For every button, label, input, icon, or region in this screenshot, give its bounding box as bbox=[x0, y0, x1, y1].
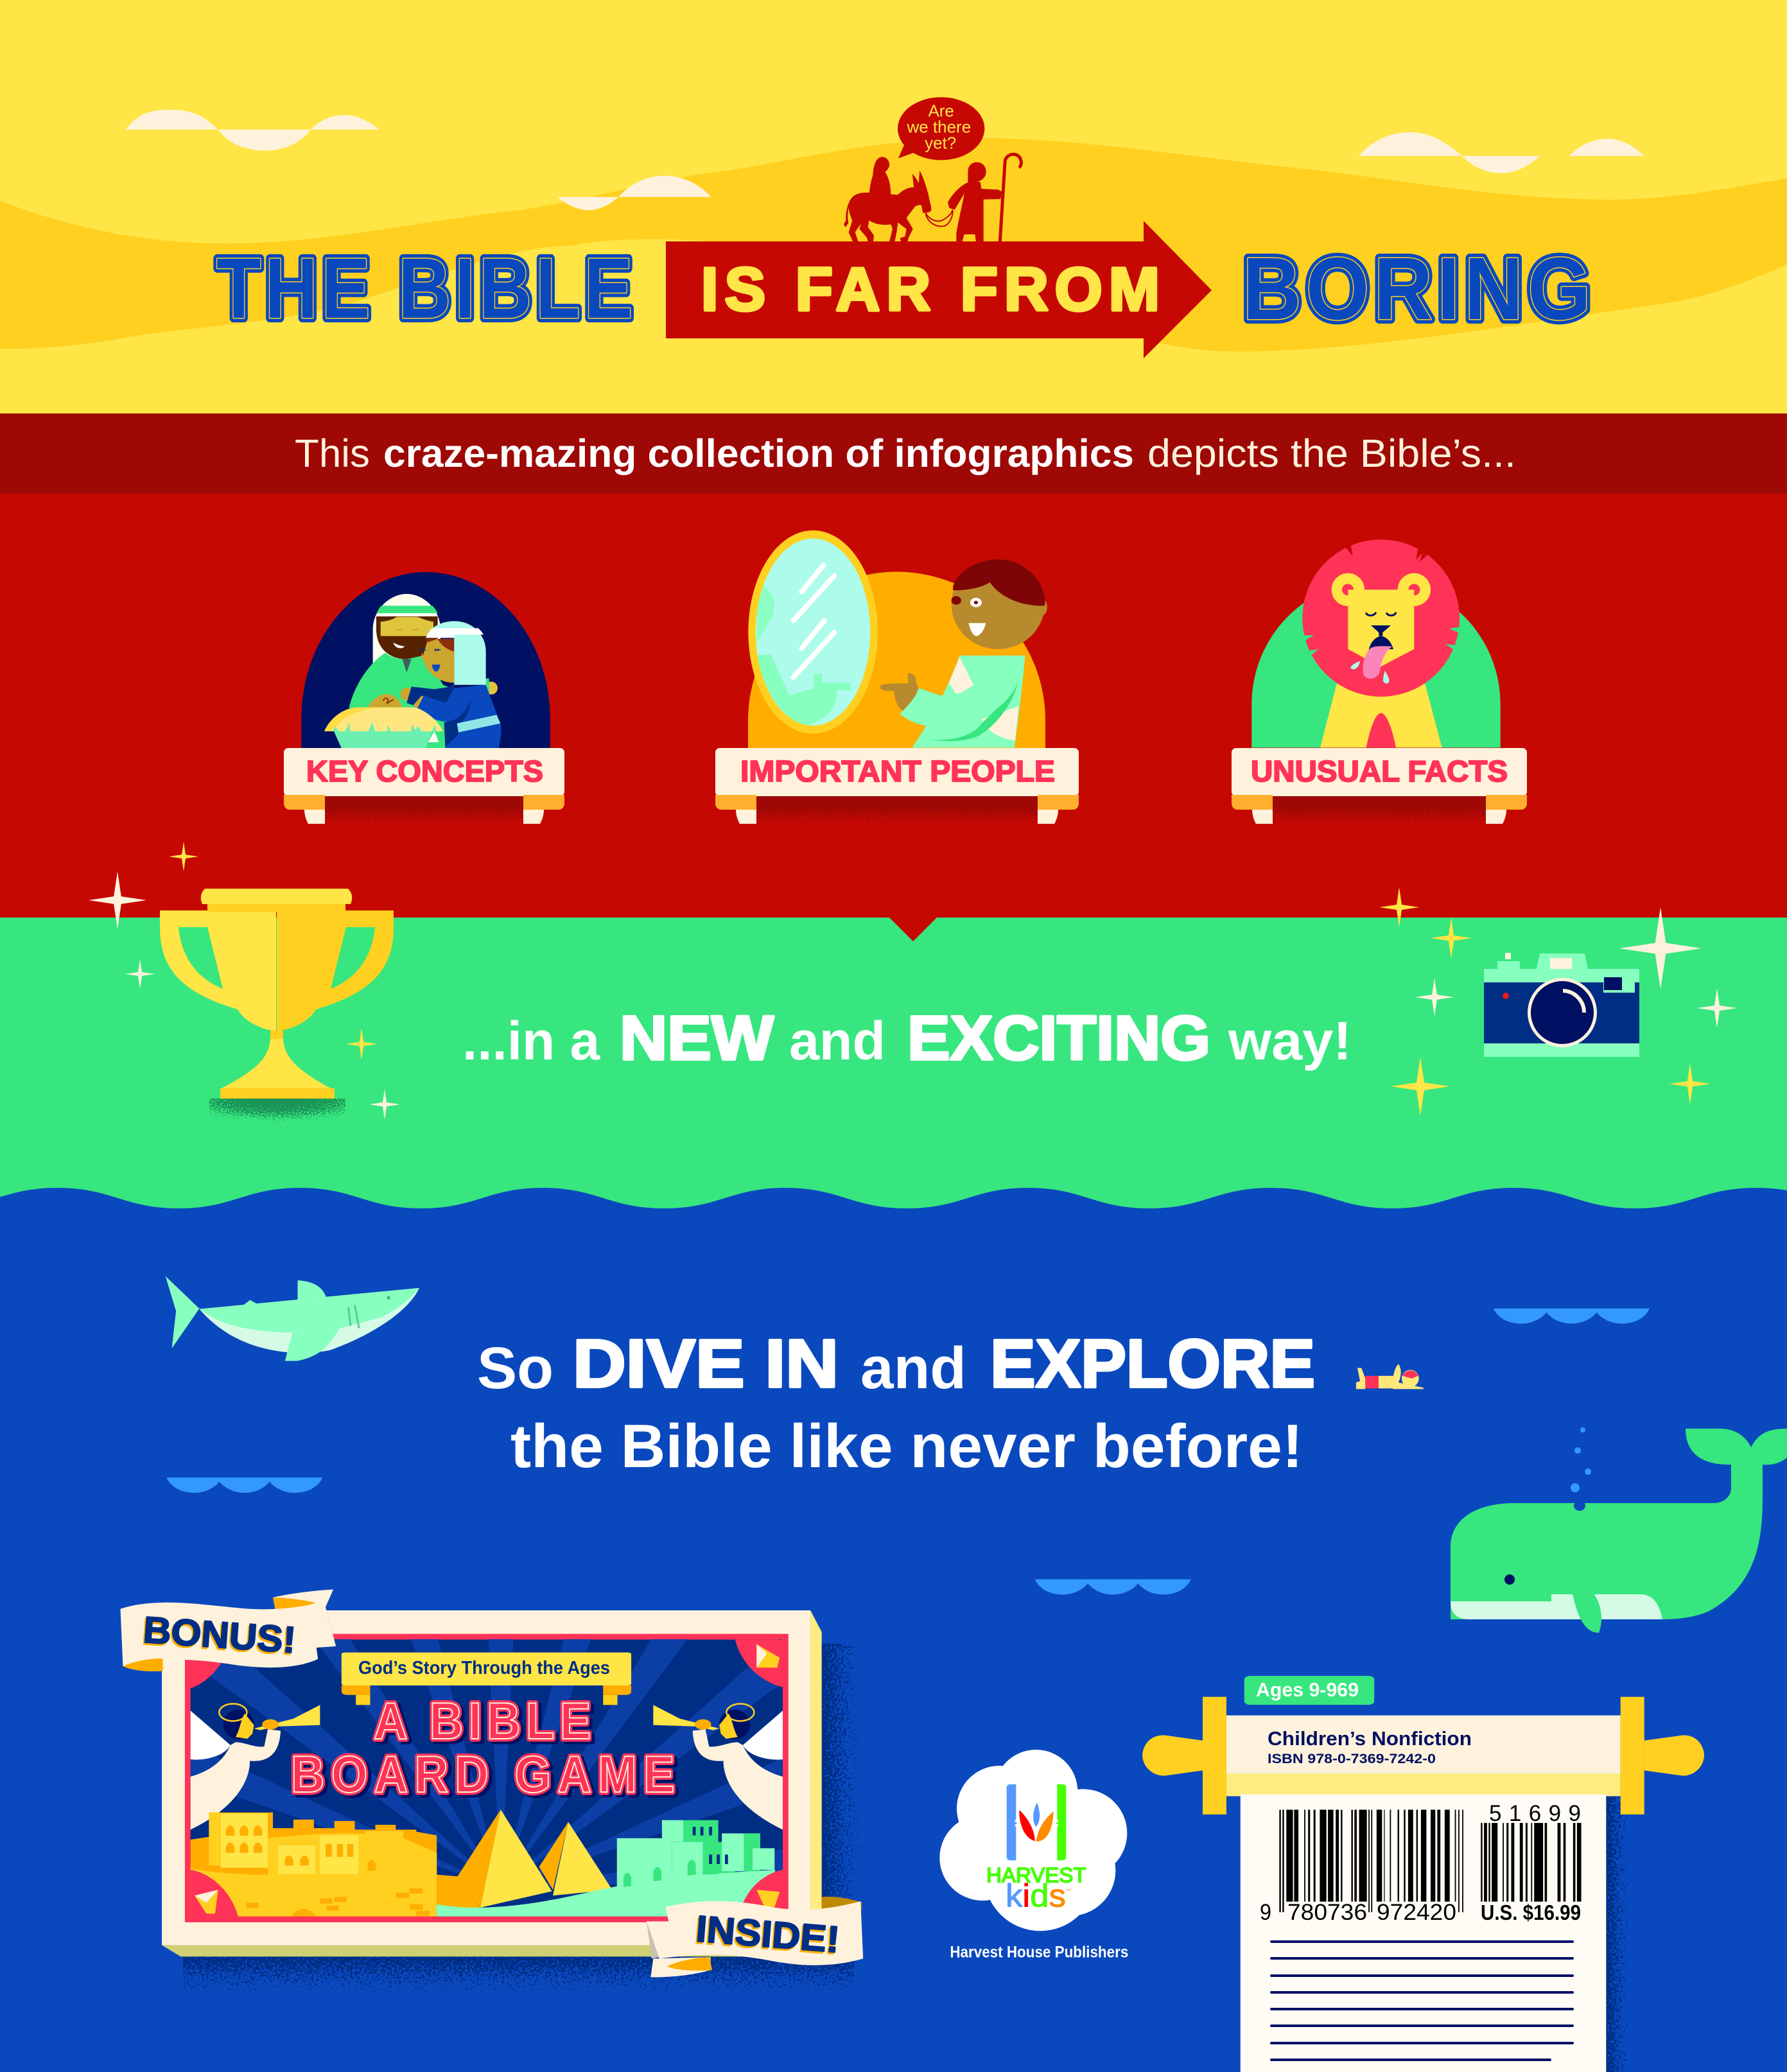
logo: Harvest Kids: ™ bbox=[1066, 1888, 1071, 1894]
icon: Mary on donkey with Joseph, silhouette bbox=[844, 97, 1022, 242]
game title: A BIBLE: A BIBLE bbox=[377, 1694, 594, 1753]
label plate: important people bbox=[715, 748, 1079, 824]
title: THE BIBLE: THE BIBLE bbox=[216, 240, 633, 336]
text: in a new and exciting way: way! bbox=[1228, 1011, 1352, 1071]
barcode bbox=[1279, 1809, 1582, 1912]
logo: Harvest Kids bbox=[939, 1750, 1128, 1961]
clouds bbox=[126, 110, 1644, 210]
scroll rollers and paper bbox=[1142, 1676, 1704, 2072]
icon: swimmer bbox=[1356, 1364, 1424, 1389]
speckled drop shadows bbox=[183, 1644, 1628, 2072]
category text: Children’s Nonfiction bbox=[1268, 1727, 1472, 1750]
text: so dive in and explore: and bbox=[860, 1336, 966, 1401]
banner: INSIDE: INSIDE! bbox=[693, 1910, 840, 1963]
game title: A BIBLE: A BIBLE bbox=[374, 1692, 591, 1750]
icon: whale bbox=[1451, 1427, 1787, 1633]
plaque: God's Story Through the Ages bbox=[342, 1653, 631, 1705]
intro text: depicts the Bible’s... bbox=[1147, 431, 1516, 475]
icon: Mary on donkey with Joseph, silhouette: Are bbox=[928, 101, 954, 121]
section: green panel background bbox=[0, 918, 1787, 1226]
banner: BONUS: BONUS! bbox=[142, 1609, 297, 1661]
panel: unusual facts bbox=[1232, 539, 1527, 824]
title: THE BIBLE: THE BIBLE bbox=[216, 240, 633, 336]
label plate: important people: IMPORTANT PEOPLE bbox=[740, 754, 1055, 788]
label plate: unusual facts bbox=[1232, 748, 1527, 824]
ISBN text: ISBN 978-0-7369-7242-0 bbox=[1268, 1752, 1436, 1766]
text: so dive in and explore: EXPLORE bbox=[990, 1326, 1315, 1402]
title: BORING: BORING bbox=[1242, 239, 1591, 338]
barcode digits: U.S. $16.99 bbox=[1481, 1901, 1581, 1924]
logo: Harvest Kids: Harvest House Publishers bbox=[950, 1944, 1128, 1961]
title: BORING: BORING bbox=[1242, 239, 1591, 338]
panel: key concepts bbox=[284, 572, 564, 824]
game title: BOARD GAME: BOARD GAME bbox=[294, 1748, 678, 1806]
text lines on paper bbox=[1270, 1940, 1574, 2061]
icon: lion bbox=[1251, 539, 1501, 747]
game title: A BIBLE: A BIBLE bbox=[374, 1692, 591, 1750]
label plate: key concepts bbox=[284, 748, 564, 824]
icon: boy looking in mirror bbox=[748, 530, 1047, 747]
icon: nativity scene bbox=[301, 572, 550, 748]
label plate: key concepts: KEY CONCEPTS bbox=[306, 754, 543, 788]
text: so dive in and explore: DIVE IN bbox=[573, 1326, 839, 1402]
plaque: God's Story Through the Ages: God’s Story Through the Ages bbox=[358, 1658, 610, 1678]
text: in a new and exciting way bbox=[462, 1003, 1352, 1073]
section: yellow desert background bbox=[0, 0, 1787, 417]
title: IS FAR FROM: IS FAR FROM bbox=[701, 256, 1160, 324]
panel: important people bbox=[715, 530, 1079, 824]
icon: shark bbox=[166, 1276, 419, 1361]
text: so dive in and explore bbox=[477, 1326, 1315, 1402]
age tag text: Ages 9-969 bbox=[1256, 1678, 1359, 1701]
panel: barcode scroll bbox=[1142, 1676, 1704, 2072]
game title: BOARD GAME: BOARD GAME bbox=[291, 1745, 675, 1804]
icon: Mary on donkey with Joseph, silhouette: yet? bbox=[925, 134, 956, 153]
banner: BONUS bbox=[120, 1589, 336, 1671]
label plate: unusual facts: UNUSUAL FACTS bbox=[1251, 754, 1508, 788]
intro text bbox=[295, 431, 1516, 475]
icon: Mary on donkey with Joseph, silhouette: we there bbox=[906, 118, 971, 137]
game title: BOARD GAME: BOARD GAME bbox=[291, 1745, 675, 1804]
icon: camera bbox=[1484, 953, 1639, 1057]
corners, scenery and angels bbox=[185, 1640, 789, 1922]
intro text: This bbox=[295, 431, 370, 475]
banner: BONUS: BONUS! bbox=[141, 1611, 296, 1663]
banner: INSIDE bbox=[647, 1897, 863, 1977]
game box frame bbox=[162, 1610, 822, 1956]
section: red panel background bbox=[0, 493, 1787, 918]
sparkles around trophy and camera bbox=[89, 842, 1737, 1120]
text: so dive in and explore: So bbox=[477, 1336, 554, 1401]
text: in a new and exciting way: ...in a bbox=[462, 1011, 600, 1071]
barcode digits: 972420 bbox=[1377, 1900, 1456, 1925]
icon: trophy bbox=[160, 889, 394, 1129]
text: in a new and exciting way: NEW bbox=[620, 1003, 774, 1073]
intro text: craze-mazing collection of infographics bbox=[383, 431, 1134, 475]
icon: arch backdrop bbox=[748, 571, 1045, 748]
notch arrow pointing down bbox=[889, 917, 937, 941]
barcode digits: 51699 bbox=[1489, 1801, 1581, 1826]
banner: INSIDE: INSIDE! bbox=[695, 1908, 841, 1961]
text: in a new and exciting way: EXCITING bbox=[907, 1003, 1210, 1073]
dunes bbox=[0, 138, 1787, 423]
barcode digits bbox=[1260, 1801, 1581, 1925]
band: dark red intro strip bbox=[0, 414, 1787, 494]
logo: Harvest Kids: HARVEST bbox=[986, 1863, 1086, 1887]
text: the bible like never before: the Bible like never before! bbox=[510, 1412, 1303, 1481]
logo: Harvest Kids: kids bbox=[1006, 1877, 1066, 1913]
text: in a new and exciting way: and bbox=[789, 1011, 885, 1071]
section: blue wavy panel background bbox=[0, 1188, 1787, 2072]
barcode digits: 9 bbox=[1260, 1900, 1271, 1925]
sun rays bbox=[191, 1639, 783, 1886]
arrow banner bbox=[666, 221, 1212, 358]
wave icons: light blue scallops bbox=[166, 1309, 1650, 1594]
panel: board game box bbox=[121, 1590, 863, 1978]
barcode digits: 780736 bbox=[1287, 1900, 1367, 1925]
